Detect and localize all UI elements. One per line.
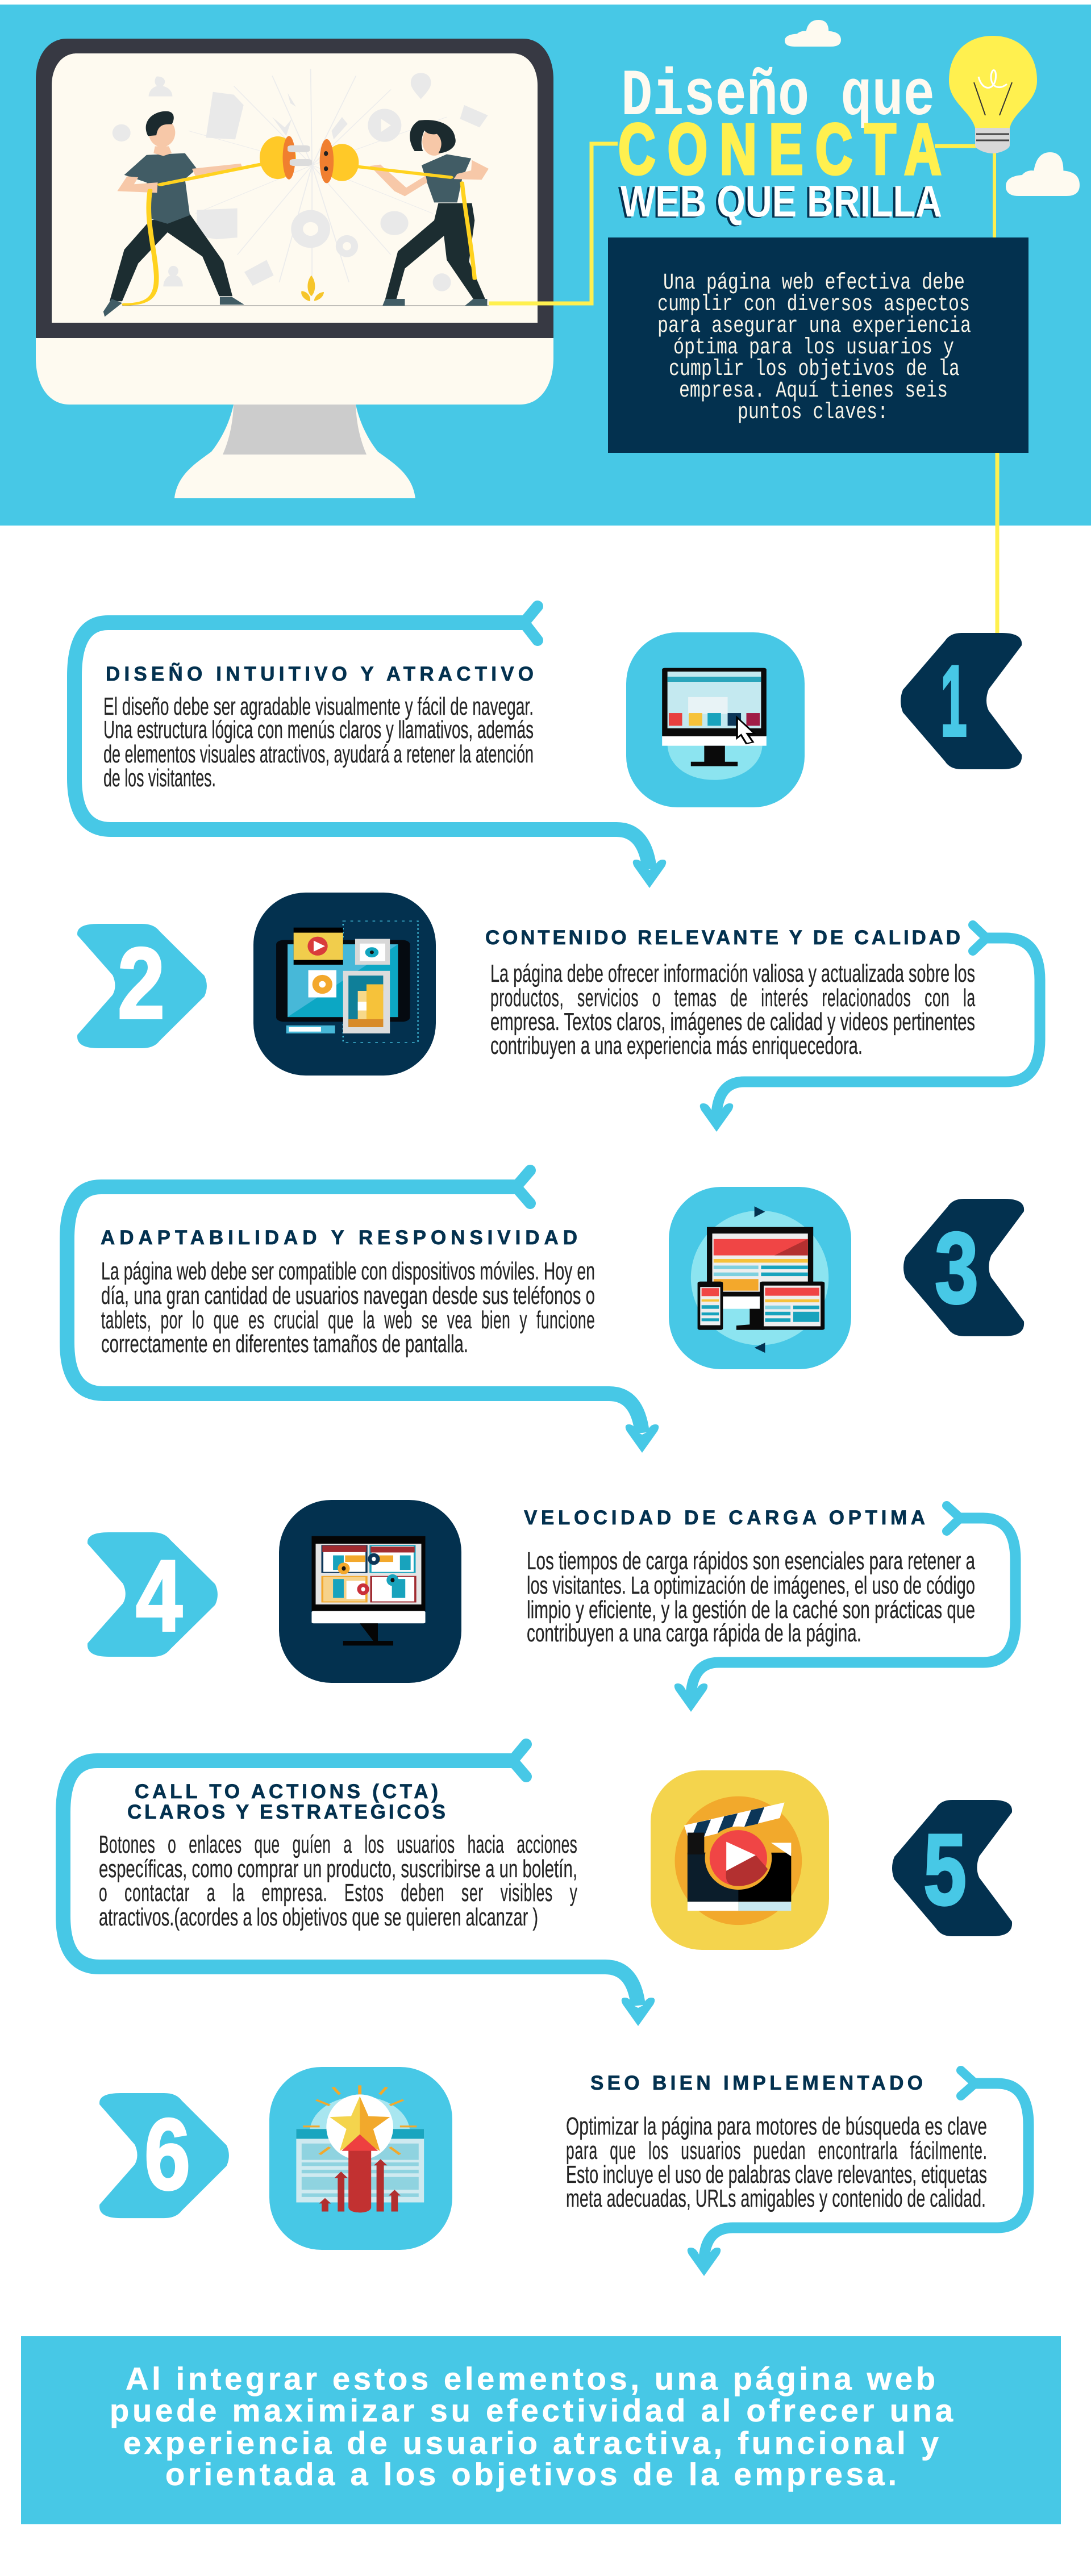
heading 3: ADAPTABILIDAD Y RESPONSIVIDAD xyxy=(101,1227,577,1249)
ribbon arrow 5 xyxy=(63,1744,655,2026)
conclusion text xyxy=(110,2361,953,2492)
text block 5 xyxy=(99,1830,577,1931)
plugs xyxy=(260,136,359,183)
icon: large cloud xyxy=(1006,152,1080,196)
panel: point 5 xyxy=(63,1744,1012,2026)
number badge 2 xyxy=(77,924,207,1048)
heading 5: CLAROS Y ESTRATEGICOS xyxy=(127,1801,445,1823)
text block 3: correctamente en diferentes tamaños de pantalla. xyxy=(101,1330,468,1358)
title line: CONECTA: CONECTA xyxy=(618,110,942,190)
panel: point 6 xyxy=(99,2067,1028,2276)
woman xyxy=(370,120,489,306)
number badge 4 xyxy=(88,1532,218,1657)
text block 1: de los visitantes. xyxy=(103,764,216,792)
text block 6: para que los usuarios puedan encontrarla fácilmente. xyxy=(566,2136,987,2165)
text block 4: contribuyen a una carga rápida de la página. xyxy=(527,1619,861,1647)
heading 5 xyxy=(127,1781,445,1823)
text block 1: de elementos visuales atractivos, ayudará a retener la atención xyxy=(103,740,534,768)
number badge 4: 4 xyxy=(136,1539,182,1652)
heading 6: SEO BIEN IMPLEMENTADO xyxy=(590,2072,923,2094)
title line: WEB QUE BRILLA: WEB QUE BRILLA xyxy=(621,176,942,226)
conclusion text: experiencia de usuario atractiva, funcional y xyxy=(123,2425,939,2461)
panel: intro text: para asegurar una experiencia xyxy=(657,314,971,339)
number badge 5: 5 xyxy=(923,1813,967,1926)
panel: intro text: óptima para los usuarios y xyxy=(673,335,954,361)
title line: Diseño que: Diseño que xyxy=(621,59,935,134)
number badge 5 xyxy=(892,1800,1012,1936)
icon: small cloud xyxy=(785,20,841,47)
icon: content tablet xyxy=(253,893,436,1076)
panel: header xyxy=(0,5,1091,634)
ribbon arrow 6 xyxy=(688,2070,1028,2276)
number badge 2: 2 xyxy=(118,927,165,1040)
text block 4 xyxy=(527,1547,975,1647)
text block 6 xyxy=(566,2112,987,2212)
text block 5: atractivos.(acordes a los objetivos que se quieren alcanzar ) xyxy=(99,1903,538,1931)
panel: intro text: puntos claves: xyxy=(738,400,888,426)
number badge 6: 6 xyxy=(144,2098,190,2211)
ribbon arrow 1 xyxy=(74,606,666,888)
heading 2: CONTENIDO RELEVANTE Y DE CALIDAD xyxy=(485,927,960,949)
text block 2 xyxy=(490,960,976,1060)
text block 1: El diseño debe ser agradable visualmente y fácil de navegar. xyxy=(103,693,534,720)
icon: video clapperboard xyxy=(651,1770,829,1950)
panel: point 4 xyxy=(88,1500,1015,1712)
text block 3: día, una gran cantidad de usuarios navegan desde sus teléfonos o xyxy=(101,1282,595,1310)
conclusion text: puede maximizar su efectividad al ofrecer una xyxy=(110,2392,953,2428)
icon: web design monitor xyxy=(626,632,805,807)
panel: conclusion xyxy=(21,2336,1061,2524)
text block 1: Una estructura lógica con menús claros y llamativos, además xyxy=(103,716,534,744)
number badge 3 xyxy=(903,1199,1024,1336)
panel: intro text xyxy=(608,237,1028,453)
text block 5: Botones o enlaces que guíen a los usuarios hacia acciones xyxy=(99,1830,577,1858)
conclusion text: orientada a los objetivos de la empresa. xyxy=(165,2456,897,2492)
panel: intro text: Una página web efectiva debe xyxy=(663,270,965,296)
conclusion text: Al integrar estos elementos, una página web xyxy=(126,2361,935,2396)
number badge 1: 1 xyxy=(940,644,967,757)
cords xyxy=(124,165,474,305)
heading 5: CALL TO ACTIONS (CTA) xyxy=(135,1781,438,1803)
yellow connector lines xyxy=(489,144,997,634)
text block 1 xyxy=(103,693,534,792)
number badge 3: 3 xyxy=(935,1211,978,1324)
panel: intro text: cumplir con diversos aspectos xyxy=(657,292,970,318)
text block 2: contribuyen a una experiencia más enriquecedora. xyxy=(490,1032,863,1060)
ribbon arrow 4 xyxy=(674,1506,1015,1712)
text block 5: específicas, como comprar un producto, suscribirse a un boletín, xyxy=(99,1855,577,1883)
text block 3 xyxy=(101,1257,595,1358)
panel: intro text: cumplir los objetivos de la xyxy=(669,357,960,382)
icon: light bulb xyxy=(949,36,1037,153)
icon: plant xyxy=(301,276,324,301)
text block 3: La página web debe ser compatible con dispositivos móviles. Hoy en xyxy=(101,1257,595,1285)
text block 3: tablets, por lo que es crucial que la web se vea bien y funcione xyxy=(101,1306,595,1334)
illustration: people pulling plugs xyxy=(103,69,489,317)
icon: SEO star and arrows xyxy=(269,2067,452,2250)
icon: computer monitor with illustration xyxy=(36,39,553,498)
panel: point 3 xyxy=(67,1170,1024,1453)
ribbon arrow 2 xyxy=(700,925,1040,1132)
panel: intro text: empresa. Aquí tienes seis xyxy=(679,378,948,404)
panel: point 1 xyxy=(74,606,1022,888)
title xyxy=(618,59,942,226)
man xyxy=(103,111,244,317)
text block 2: productos, servicios o temas de interés relacionados con la xyxy=(490,983,976,1012)
text block 5: o contactar a la empresa. Estos deben ser visibles y xyxy=(99,1878,577,1907)
number badge 1 xyxy=(901,633,1022,769)
panel: point 2 xyxy=(77,893,1040,1132)
ribbon arrow 3 xyxy=(67,1170,659,1453)
heading 1: DISEÑO INTUITIVO Y ATRACTIVO xyxy=(106,663,534,685)
heading 4: VELOCIDAD DE CARGA OPTIMA xyxy=(524,1507,925,1529)
icon: speed monitor xyxy=(279,1500,461,1683)
number badge 6 xyxy=(99,2093,229,2218)
icon: responsive devices xyxy=(669,1187,851,1369)
